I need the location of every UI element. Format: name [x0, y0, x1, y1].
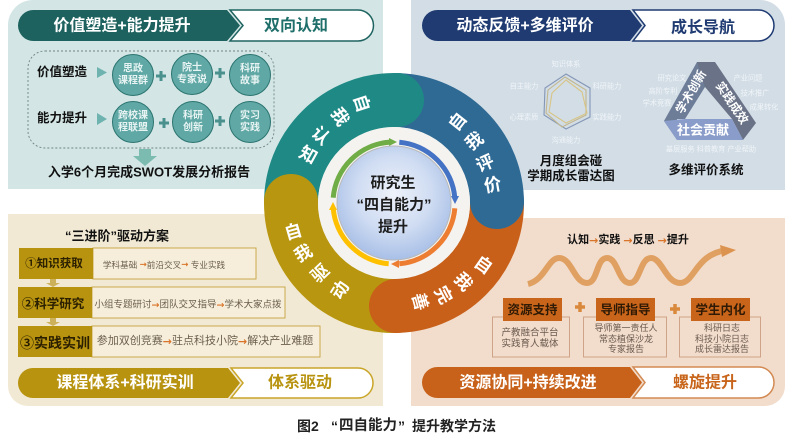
circle: 跨校课程联盟: 跨校课 — [118, 108, 148, 122]
card: student internalization — [680, 298, 760, 357]
circle: 科研创新: 科研 — [183, 108, 203, 122]
heading: three-stage plan: “三进阶”驱动方案 — [65, 228, 169, 244]
chart: monthly growth radar — [510, 60, 621, 183]
segment label: 自我评价: 我 — [461, 127, 488, 154]
chart: multidimensional evaluation triangle — [643, 62, 778, 177]
card: mentor guidance: 常态植保沙龙 — [599, 333, 653, 344]
row: knowledge acquisition — [19, 248, 256, 279]
segment label: 自我认知: 认 — [307, 122, 334, 149]
chart: monthly growth radar: 知识体系 — [552, 60, 580, 68]
segment label: 自我驱动: 驱 — [307, 260, 333, 287]
row: scientific research — [18, 287, 285, 318]
circle: 科研故事: 故事 — [240, 74, 260, 86]
chart: multidimensional evaluation triangle: 技术推广 — [741, 88, 769, 98]
header bar: value shaping and ability: 价值塑造+能力提升 — [53, 16, 191, 34]
chart: multidimensional evaluation triangle: 研究论文 — [658, 74, 686, 82]
chart: multidimensional evaluation triangle: 实践成效 — [713, 79, 752, 127]
circle: 思政课程群: 课程群 — [118, 74, 148, 86]
dashed content frame: 价值塑造 — [37, 64, 87, 79]
segment label: 自我认知: 知 — [296, 142, 321, 168]
center disc title: 研究生 — [370, 174, 416, 192]
segment label: 自我评价: 自 — [444, 109, 471, 135]
segment label: 自我完善: 我 — [450, 269, 477, 295]
central ring diagram — [264, 73, 524, 333]
segment label: 自我评价 — [444, 109, 504, 196]
circle: 科研创新: 创新 — [183, 120, 203, 134]
chart: multidimensional evaluation triangle: 成果转化 — [750, 102, 778, 112]
header bar: dynamic feedback — [422, 10, 774, 41]
chart: monthly growth radar: 科研能力 — [593, 82, 621, 90]
heading: cognition cycle: 认知→实践 →反思 →提升 — [567, 232, 689, 246]
arrow: step one to two — [46, 279, 60, 287]
chart: monthly growth radar: 自主能力 — [510, 82, 538, 90]
circle: 科研故事 — [230, 54, 270, 96]
header bar: dynamic feedback: 动态反馈+多维评价 — [456, 16, 594, 34]
card: resource support — [492, 298, 570, 357]
figure caption: 图2 — [297, 418, 319, 434]
chart: multidimensional evaluation triangle: 多维评价系统 — [668, 162, 744, 177]
circle: 实习实践: 实习 — [240, 108, 260, 122]
circle: 实习实践 — [230, 102, 270, 142]
chart: multidimensional evaluation triangle: 学术竞赛 — [643, 98, 671, 108]
segment label: 自我驱动 — [282, 220, 353, 303]
chart: multidimensional evaluation triangle: 社会贡献 — [677, 122, 729, 138]
chart: monthly growth radar: 实践能力 — [593, 112, 621, 122]
panel: bottom-right resources and improvement — [411, 218, 785, 406]
chart: multidimensional evaluation triangle: 高阶专利 — [649, 86, 677, 96]
segment label: 自我认知: 我 — [327, 104, 353, 130]
segment label: 自我评价: 价 — [482, 174, 504, 196]
row: practical training: 参加双创竞赛→驻点科技小院→解决产业难题 — [97, 333, 313, 348]
circle: 跨校课程联盟 — [112, 102, 154, 142]
card: resource support: 资源支持 — [507, 302, 558, 317]
segment label: 自我驱动: 动 — [327, 277, 353, 303]
center disc title: “四自能力” — [356, 196, 432, 214]
card: student internalization: 成长雷达报告 — [695, 343, 749, 354]
icon: plus — [670, 304, 680, 314]
chart: monthly growth radar: 心理素质 — [510, 112, 538, 122]
card: resource support: 产教融合平台 — [501, 326, 559, 338]
circle: 科研故事: 科研 — [240, 62, 260, 74]
segment label: 自我完善: 完 — [430, 283, 456, 307]
arrow: rising spiral wave — [528, 245, 736, 284]
header bar: resource synergy: 螺旋提升 — [673, 374, 737, 392]
header bar: value shaping and ability — [18, 10, 373, 41]
card: student internalization: 科研日志 — [704, 322, 740, 333]
header bar: resource synergy — [422, 367, 774, 398]
circle: 跨校课程联盟: 程联盟 — [118, 120, 148, 134]
icon: plus — [575, 302, 585, 312]
figure caption: 四自能力 — [339, 416, 397, 434]
row: practical training: ③实践实训 — [20, 335, 90, 351]
row: knowledge acquisition: 学科基础 →前沿交叉→ 专业实践 — [103, 259, 226, 270]
row: scientific research: 小组专题研讨→团队交叉指导→学术大家点拨 — [95, 298, 282, 310]
figure caption: 提升教学方法 — [412, 418, 496, 434]
segment label: 自我完善 — [408, 252, 496, 313]
header bar: resource synergy: 资源协同+持续改进 — [459, 374, 597, 392]
figure caption — [297, 416, 496, 434]
circle: 实习实践: 实践 — [240, 120, 260, 134]
header bar: curriculum and research: 课程体系+科研实训 — [56, 372, 194, 392]
dashed content frame — [28, 51, 274, 148]
figure caption: ” — [398, 418, 405, 434]
center disc title — [337, 146, 451, 260]
chart: multidimensional evaluation triangle: 学术创新 — [672, 67, 709, 116]
circle: 科研创新 — [172, 102, 214, 142]
row: knowledge acquisition: ①知识获取 — [25, 256, 83, 270]
segment label: 自我认知 — [296, 92, 374, 168]
circle: 院士专家说: 院士 — [182, 60, 202, 74]
inner cycle arrows — [329, 138, 459, 268]
circle: 思政课程群: 思政 — [123, 62, 143, 74]
header bar: curriculum and research: 体系驱动 — [268, 372, 332, 392]
segment label: 自我驱动: 自 — [282, 220, 304, 244]
card: mentor guidance — [584, 298, 666, 357]
segment label: 自我认知: 自 — [349, 92, 374, 115]
card: student internalization: 学生内化 — [695, 302, 746, 317]
segment label: 自我完善: 善 — [408, 291, 432, 313]
panel: top-left value and ability — [8, 0, 383, 189]
card: mentor guidance: 专家报告 — [608, 343, 644, 354]
center disc title: 提升 — [378, 218, 408, 236]
card: mentor guidance: 导师指导 — [600, 302, 651, 317]
segment label: 自我完善: 自 — [470, 252, 496, 278]
arrow: down to report — [133, 149, 157, 166]
circle: 院士专家说: 专家说 — [177, 72, 207, 86]
header bar: dynamic feedback: 成长导航 — [671, 18, 735, 36]
circle: 院士专家说 — [172, 54, 212, 94]
chart: multidimensional evaluation triangle: 产业问题 — [734, 74, 762, 82]
chart: multidimensional evaluation triangle: 基层服务 科普教育 产业帮助 — [666, 144, 756, 154]
header bar: value shaping and ability: 双向认知 — [264, 16, 328, 34]
text: SWOT report: 入学6个月完成SWOT发展分析报告 — [48, 164, 250, 180]
arrow: step two to three — [46, 318, 60, 326]
card: mentor guidance: 导师第一责任人 — [594, 322, 658, 333]
panel: top-right feedback and evaluation — [411, 0, 785, 190]
panel: bottom-left curriculum drive — [8, 214, 383, 406]
segment label: 自我驱动: 我 — [291, 240, 316, 266]
figure caption: “ — [331, 418, 338, 434]
dashed content frame: 能力提升 — [37, 110, 87, 125]
row: scientific research: ②科学研究 — [22, 296, 85, 311]
chart: monthly growth radar: 学期成长雷达图 — [527, 168, 615, 183]
card: resource support: 实践育人载体 — [501, 338, 559, 350]
header bar: curriculum and research — [18, 368, 373, 398]
card: student internalization: 科技小院日志 — [695, 333, 749, 344]
chart: monthly growth radar: 沟通能力 — [552, 136, 580, 144]
row: practical training — [18, 326, 320, 357]
segment label: 自我评价: 评 — [473, 151, 497, 176]
chart: monthly growth radar: 月度组会碰 — [540, 153, 602, 168]
circle: 思政课程群 — [112, 54, 154, 96]
